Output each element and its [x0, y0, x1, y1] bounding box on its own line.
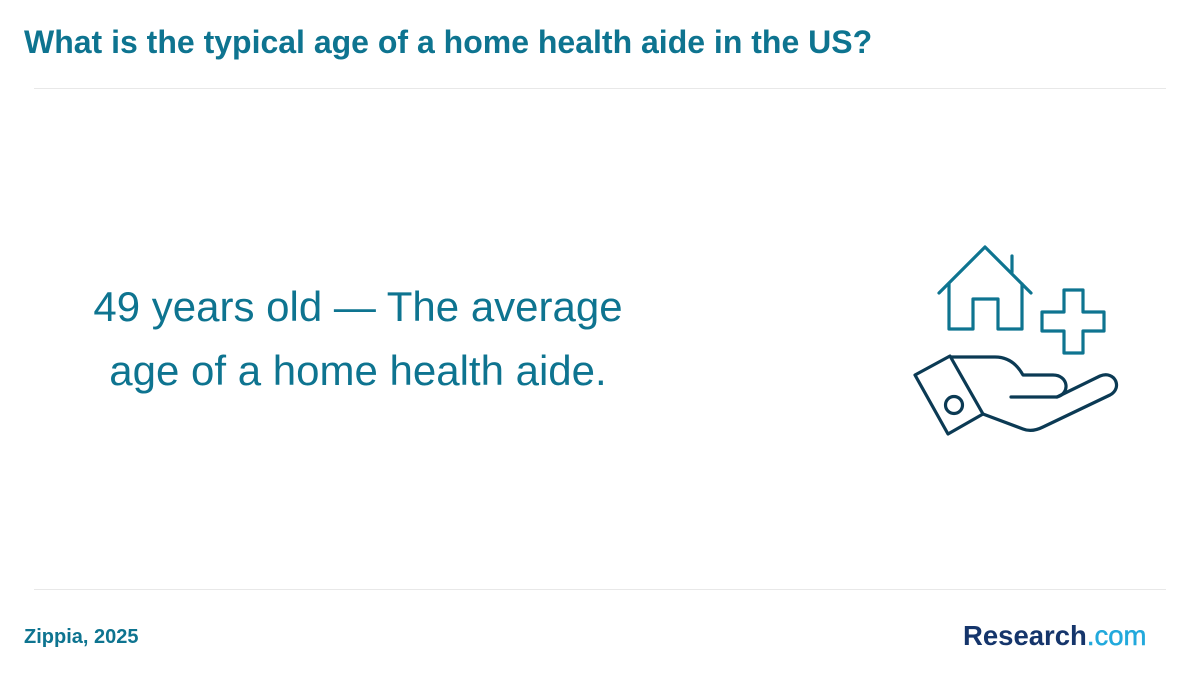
logo: Research.com [963, 620, 1146, 651]
main statement: age of a home health aide. [109, 347, 607, 394]
icon: house, medical cross and caring hand [913, 245, 1118, 436]
source: Zippia, 2025 [24, 626, 138, 648]
icon: house [939, 247, 1031, 329]
title: What is the typical age of a home health aide in the US? [24, 24, 872, 60]
icon: hand [915, 356, 1117, 434]
main statement: 49 years old — The average [93, 283, 623, 330]
main statement [93, 283, 623, 394]
icon: medical cross [1042, 290, 1104, 353]
